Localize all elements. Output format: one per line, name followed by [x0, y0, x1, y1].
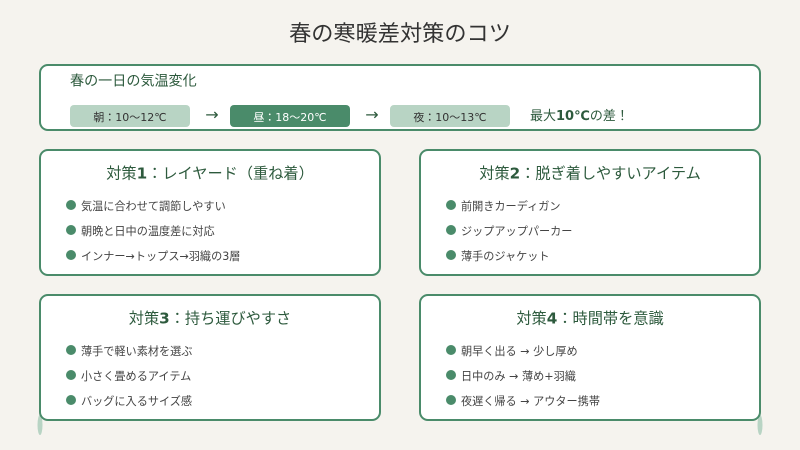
noon temperature pill: 昼：18〜20℃ [253, 111, 327, 124]
bullet list: tip 1: 朝晩と日中の温度差に対応 [81, 225, 215, 238]
bullet list: tip 3: 薄手で軽い素材を選ぶ [81, 344, 192, 358]
panel: tip 4 [420, 295, 760, 420]
panel heading: 春の一日の気温変化 [70, 74, 197, 90]
bullet list: tip 2: 前開きカーディガン [461, 199, 560, 213]
bullet list: tip 2 [446, 199, 572, 263]
bullet list: tip 1 [66, 199, 240, 263]
icon: left leaf [38, 415, 42, 435]
panel: tip 2 [420, 150, 760, 275]
title: 春の寒暖差対策のコツ [289, 21, 511, 47]
icon: right leaf [758, 415, 762, 435]
heading: tip 3: 対策3：持ち運びやすさ [129, 310, 291, 328]
bullet list: tip 1: インナー→トップス→羽織の3層 [81, 249, 240, 263]
panel: tip 1 [40, 150, 380, 275]
bullet list: tip 1: 気温に合わせて調節しやすい [81, 199, 226, 213]
heading: tip 4: 対策4：時間帯を意識 [516, 310, 664, 328]
bullet list: tip 4: 夜遅く帰る → アウター携帯 [461, 395, 600, 408]
bullet list: tip 2: ジップアップパーカー [461, 225, 572, 238]
morning temperature pill: 朝：10〜12℃ [93, 111, 167, 124]
bullet list: tip 2: 薄手のジャケット [461, 249, 550, 263]
heading: tip 1: 対策1：レイヤード（重ね着） [106, 164, 314, 182]
bullet list: tip 3 [66, 344, 192, 408]
callout: max difference: 最大10℃の差！ [530, 109, 629, 124]
bullet list: tip 4: 朝早く出る → 少し厚め [461, 344, 578, 358]
night temperature pill [390, 105, 510, 127]
heading: tip 2: 対策2：脱ぎ着しやすいアイテム [479, 164, 701, 182]
night temperature pill: 夜：10〜13℃ [413, 111, 487, 124]
arrow: noon to night: → [365, 105, 379, 124]
bullet list: tip 4 [446, 344, 600, 408]
arrow: morning to noon: → [205, 105, 219, 124]
bullet list: tip 3: 小さく畳めるアイテム [81, 370, 191, 383]
morning temperature pill [70, 105, 190, 127]
panel: daily temperature change [40, 65, 760, 130]
bullet list: tip 4: 日中のみ → 薄め+羽織 [461, 369, 576, 383]
bullet list: tip 3: バッグに入るサイズ感 [81, 394, 192, 408]
panel: tip 3 [40, 295, 380, 420]
noon temperature pill [230, 105, 350, 127]
